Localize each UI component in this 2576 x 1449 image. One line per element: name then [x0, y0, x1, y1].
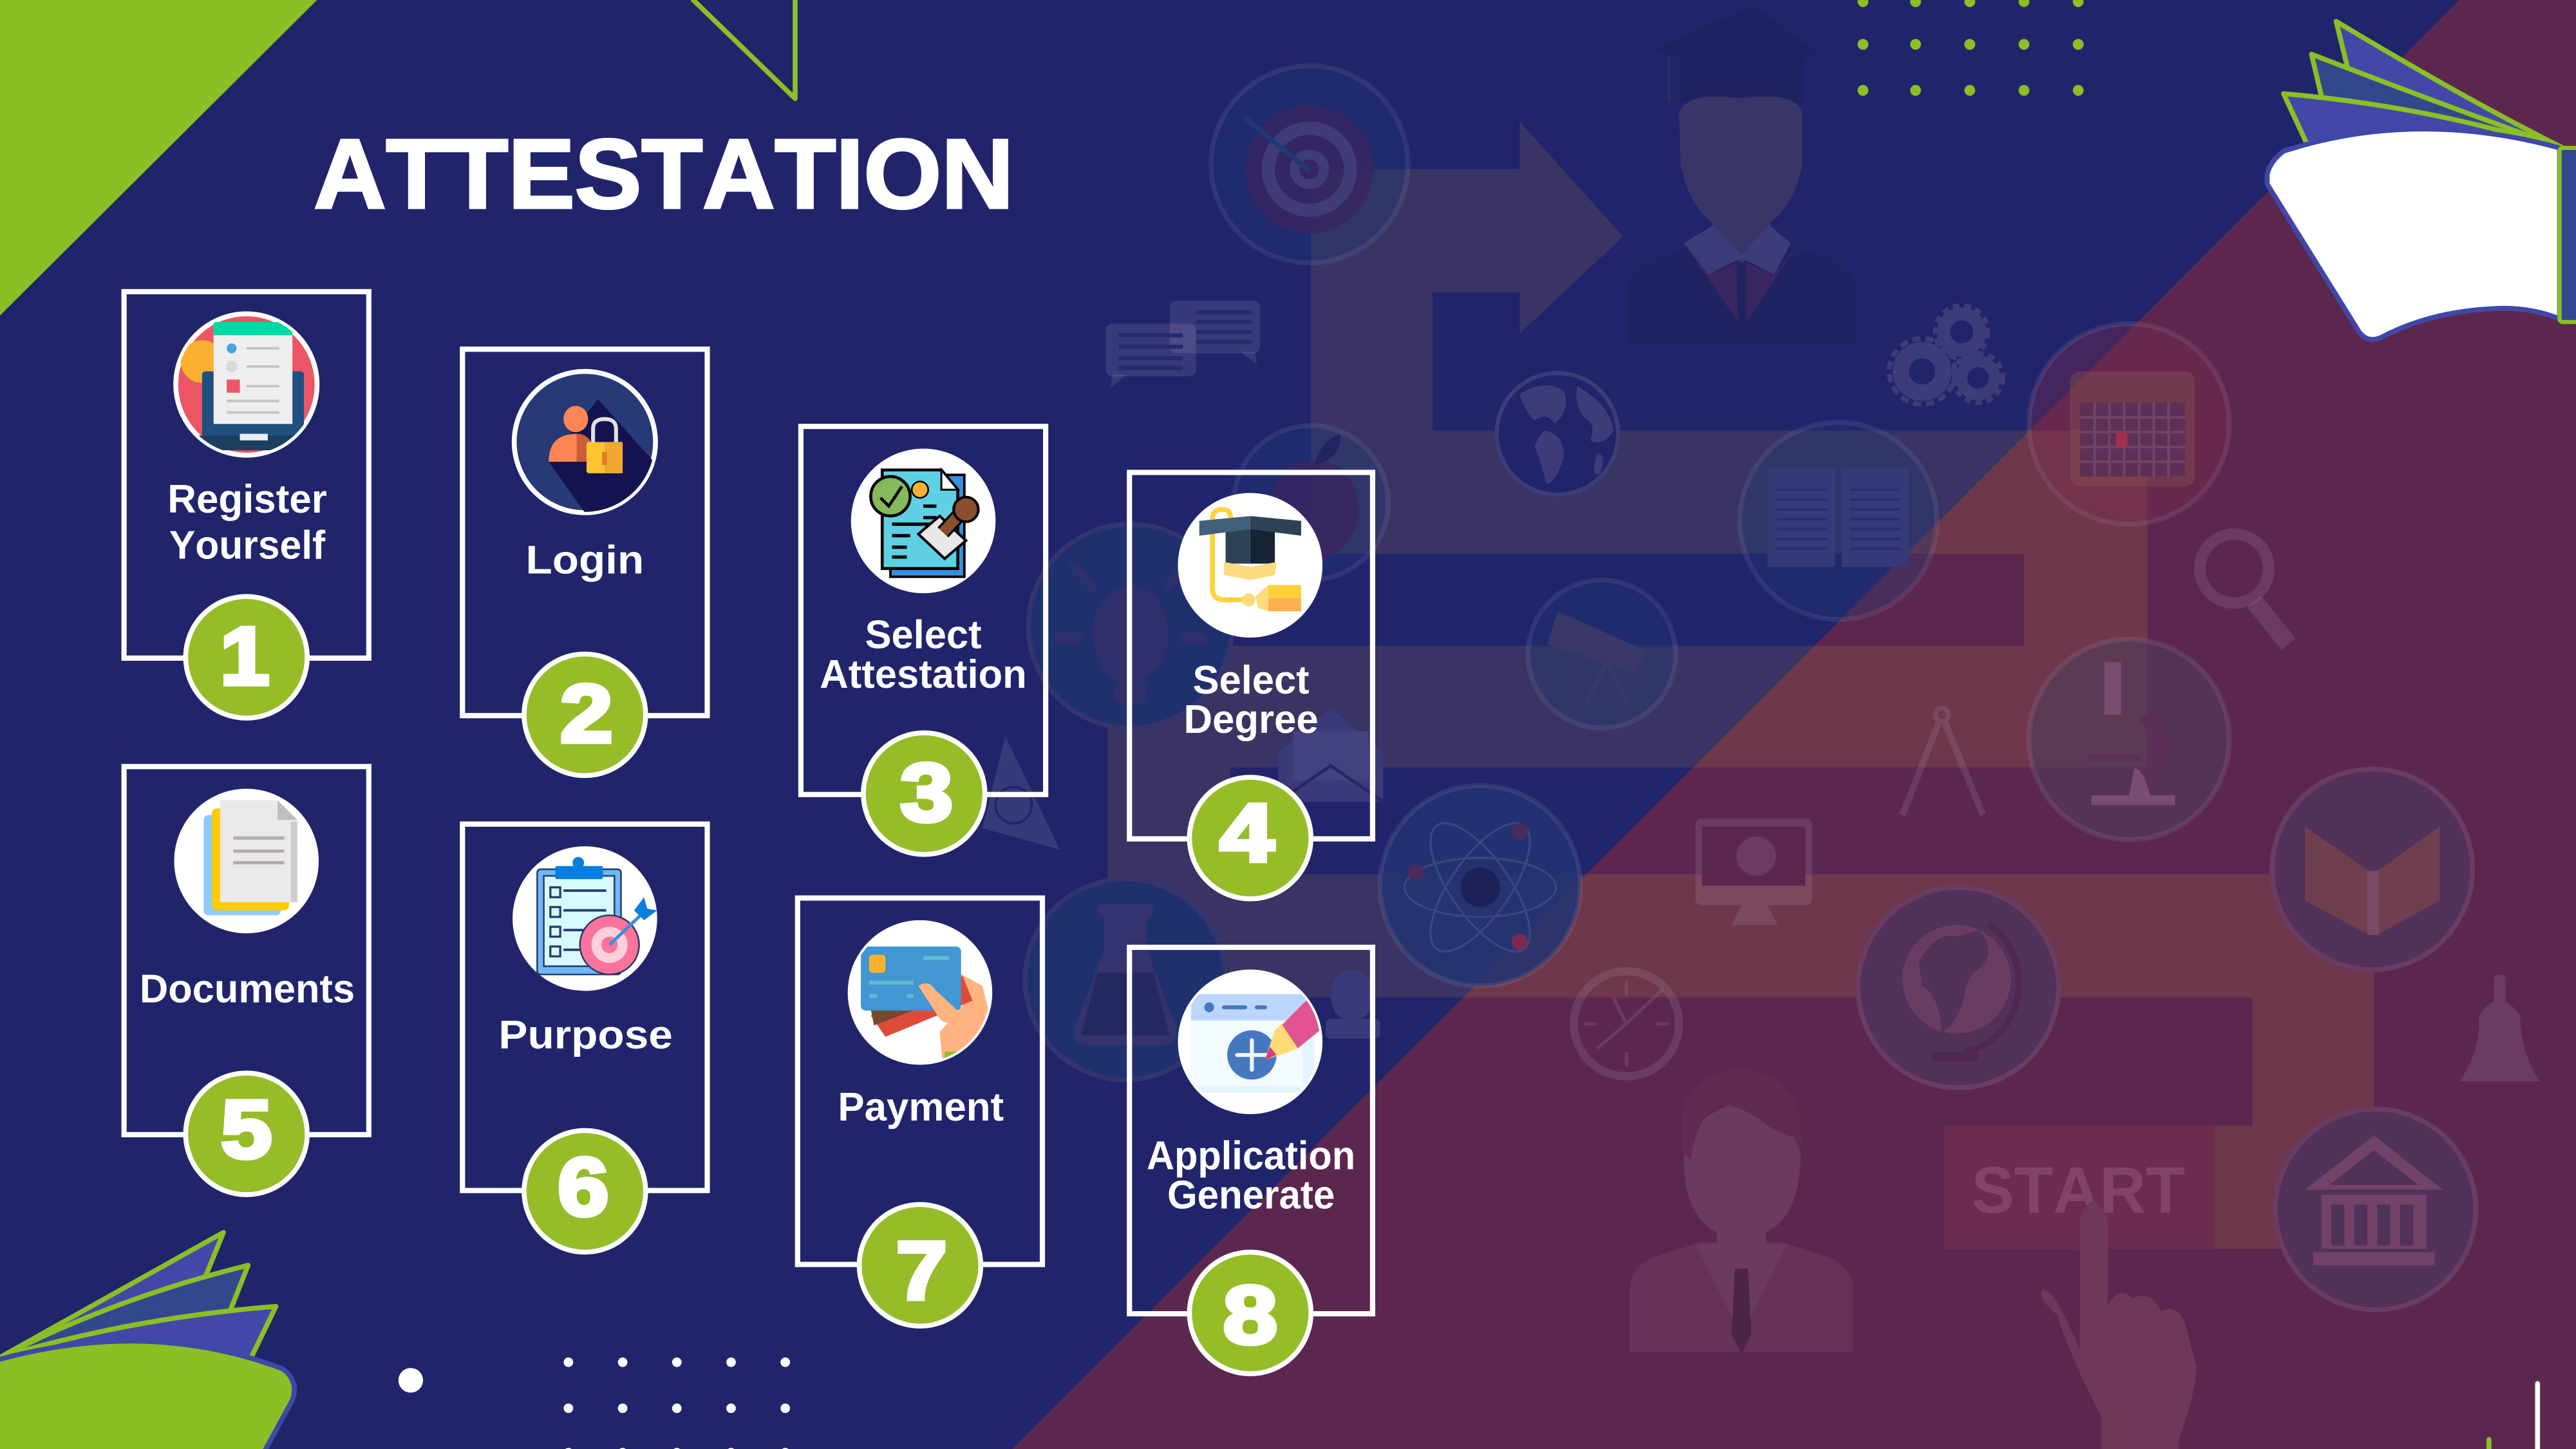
step 3 badge [863, 733, 985, 855]
step 1 badge [185, 596, 307, 718]
decoration: green dot grid [1857, 0, 2083, 96]
step 3 card [801, 426, 1046, 855]
step 4 frame [1129, 473, 1373, 839]
step 2 frame [462, 349, 707, 715]
step 8 card [1129, 947, 1373, 1374]
step 3 frame [801, 426, 1046, 795]
decoration: corner white line [2537, 1383, 2539, 1449]
icon: documents stack [174, 789, 319, 933]
icon: login user lock [514, 372, 655, 524]
watermark: envelope [1278, 708, 1383, 802]
watermark: gears [1889, 306, 2002, 404]
watermark: microscope circle [2029, 639, 2230, 840]
decoration: white dot [399, 1368, 423, 1392]
step 5 label: Documents [140, 966, 355, 1011]
icon: register laptop form [176, 314, 317, 455]
icon: purpose checklist target [512, 846, 657, 991]
step 1 label: Yourself [169, 523, 325, 568]
step 7 label: Payment [838, 1084, 1004, 1130]
step 1 frame [124, 292, 369, 658]
step 6 badge: 6 [558, 1142, 608, 1233]
step 7 card [798, 898, 1042, 1326]
step 7 badge [860, 1204, 981, 1326]
step 1 card [124, 292, 369, 718]
watermark: calendar circle [2029, 324, 2230, 524]
watermark: maze path arrow [1107, 122, 2374, 1249]
step 6 card [462, 824, 707, 1252]
watermark: small person [1326, 969, 1380, 1039]
decoration: open book top right [2267, 21, 2576, 339]
step 8 badge: 8 [1223, 1270, 1277, 1361]
decoration: corner green line [2488, 1439, 2490, 1449]
step 1 label [167, 477, 327, 568]
step 3 label [820, 612, 1027, 697]
step 4 label: Select [1193, 658, 1310, 703]
step 4 label [1183, 658, 1319, 742]
step 7 badge: 7 [896, 1226, 947, 1317]
watermark: clock [1574, 971, 1679, 1076]
watermark: compass tool [1903, 708, 1983, 815]
step 2 label: Login [526, 538, 644, 583]
step 3 badge: 3 [900, 748, 953, 839]
step 8 label [1147, 1133, 1355, 1218]
watermark: light bulb circle [1028, 524, 1232, 728]
watermark: magnifier [2200, 534, 2288, 644]
step 4 label: Degree [1183, 697, 1319, 742]
step 8 frame [1129, 947, 1373, 1314]
step 3 label: Select [865, 612, 982, 658]
decoration: green corner triangle [0, 0, 317, 316]
decoration: open book bottom left [0, 1233, 294, 1449]
decoration: green outline wedge [693, 0, 795, 99]
watermark: start block [1944, 1126, 2215, 1249]
watermark: businessman [1630, 1070, 1853, 1354]
watermark: open book circle right [2272, 769, 2472, 969]
step 1 badge: 1 [220, 611, 269, 703]
watermark: monitor [1695, 819, 1812, 925]
step 5 badge: 5 [221, 1084, 272, 1176]
step 2 card [462, 349, 707, 775]
step 6 badge [524, 1131, 646, 1252]
watermark: small globe [1497, 373, 1618, 495]
icon: payment cards in hand [848, 920, 992, 1072]
watermark: pointing hand [2041, 1201, 2197, 1449]
step 7 frame [798, 898, 1042, 1264]
step 2 badge: 2 [560, 668, 613, 760]
watermark: bank circle [2275, 1109, 2476, 1310]
step 2 badge [524, 654, 646, 775]
step 8 label: Application [1147, 1133, 1355, 1178]
icon: attestation document stamp [851, 449, 995, 593]
watermark: triangle ruler [982, 736, 1060, 849]
icon: degree mortarboard [1178, 493, 1322, 638]
step 5 badge [185, 1073, 307, 1195]
step 3 label: Attestation [820, 652, 1027, 697]
step 8 badge [1189, 1252, 1311, 1374]
watermark: open book circle [1740, 422, 1937, 620]
step 5 card [124, 766, 369, 1195]
title: ATTESTATION [314, 119, 1013, 229]
step 4 card [1129, 473, 1373, 899]
step 6 frame [462, 824, 707, 1191]
step 1 label: Register [167, 477, 327, 522]
watermark: atom circle [1380, 786, 1581, 986]
watermark: speech bubbles [1105, 301, 1260, 388]
step 6 label: Purpose [498, 1012, 673, 1057]
decoration: white dot grid [563, 1358, 790, 1449]
watermark: start block: START [1971, 1153, 2185, 1227]
watermark: telescope circle [1528, 580, 1676, 728]
watermark: large globe circle [1858, 887, 2058, 1088]
watermark: bell [2459, 974, 2540, 1081]
step 4 badge [1189, 777, 1311, 899]
watermark: target circle [1211, 66, 1408, 263]
step 8 label: Generate [1167, 1173, 1335, 1218]
icon: application window pencil [1178, 969, 1326, 1114]
watermark: flask circle [1025, 879, 1226, 1079]
watermark: graduate person [1628, 5, 1855, 346]
watermark: apple circle [1234, 426, 1388, 580]
step 4 badge: 4 [1220, 788, 1274, 879]
background maroon diagonal [1012, 0, 2576, 1449]
step 5 frame [124, 766, 369, 1135]
